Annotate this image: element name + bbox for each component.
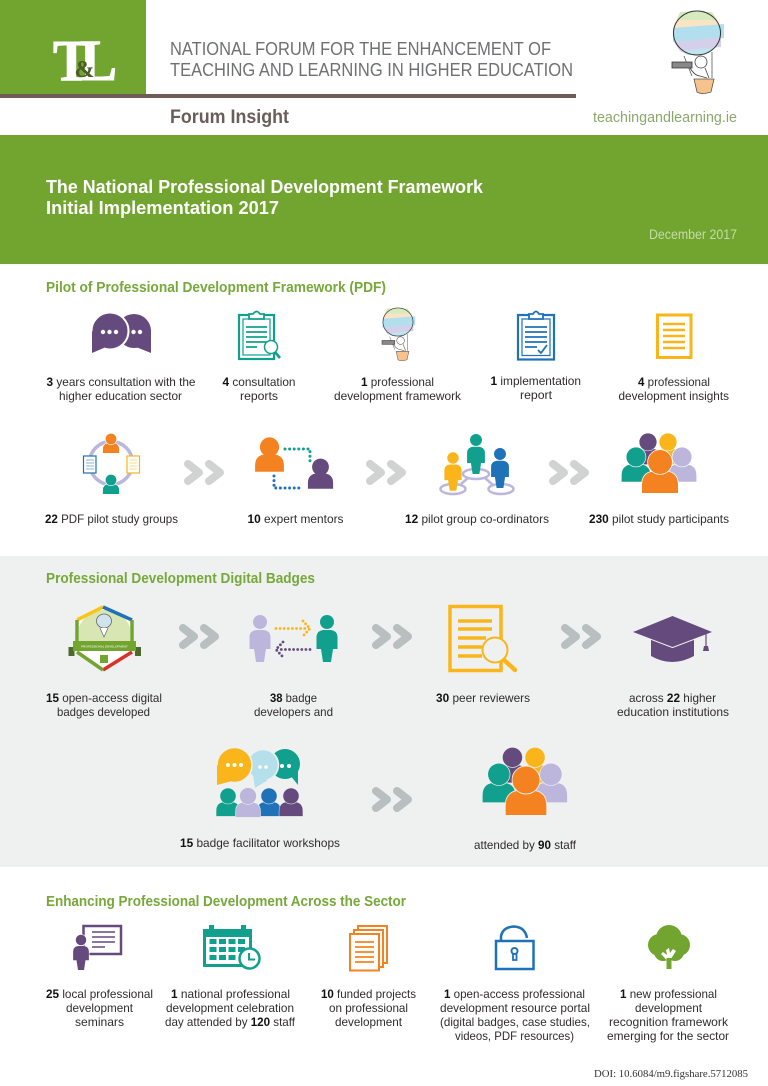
icon: pilot study groups (84, 434, 140, 494)
icon: facilitator workshop (216, 748, 303, 817)
text: across 22: education institutions (617, 705, 729, 719)
text: 1 national: development celebration (166, 1001, 294, 1015)
icon: consultation report clipboard (239, 312, 280, 359)
main title: Initial Implementation 2017 (46, 197, 279, 218)
text: 1 professional framework: 1 professional (361, 375, 434, 389)
text: 1 implementation report (490, 374, 581, 402)
icon: coordinators network (440, 434, 514, 494)
heading: pilot: Pilot of Professional Development Framework (PDF) (46, 280, 386, 296)
icon: implementation clipboard (518, 312, 554, 360)
heading: enhancing: Enhancing Professional Development Across the Sector (46, 894, 406, 910)
icon: insights document (658, 315, 691, 358)
website: teachingandlearning.ie (593, 109, 737, 126)
text: 30 reviewers: 30 peer reviewers (436, 691, 530, 705)
text: 1 implementation report: 1 implementation (490, 374, 581, 388)
text: 4 professional insights (618, 375, 729, 403)
icon: seminar presenter (73, 926, 121, 970)
arrows (183, 628, 215, 645)
label: 230 participants: 230 pilot study participants (589, 512, 729, 526)
text: 38 developers: 38 badge (270, 691, 317, 705)
text: 10 funded (321, 987, 416, 1029)
T&L logo: T (53, 28, 90, 93)
text: 90 staff: attended by 90 staff (474, 838, 577, 852)
icon: graduation cap (633, 616, 712, 662)
label: 10 mentors: 10 expert mentors (248, 512, 344, 526)
text: 10 funded: on professional (329, 1001, 408, 1015)
text: 1 new framework: 1 new professional (620, 987, 717, 1001)
icon: calendar (203, 925, 260, 968)
label: 12 coordinators: 12 pilot group co-ordinators (405, 512, 549, 526)
text: 1 open access portal: (digital badges, case studies, (440, 1015, 590, 1029)
text: 4 consultation reports: reports (240, 389, 278, 403)
text: 3 years: 3 years consultation with the (46, 375, 196, 389)
header logo panel (0, 0, 146, 95)
text: 1 national: 1 national professional (171, 987, 290, 1001)
text: 1 national: day attended by 120 staff (165, 1015, 296, 1029)
icon: hot air balloon (672, 11, 724, 94)
icon: small balloon (382, 308, 415, 361)
date: December 2017 (649, 227, 737, 242)
icon: tree (648, 925, 690, 969)
text: 1 implementation report: report (520, 388, 553, 402)
icon: open padlock (496, 926, 534, 969)
text: 4 consultation reports (222, 375, 296, 403)
main title (46, 176, 484, 218)
arrows (376, 791, 408, 808)
text: across 22: across 22 higher (629, 691, 716, 705)
text: 15 badges: 15 open-access digital (46, 691, 162, 705)
heading: badges: Professional Development Digital Badges (46, 571, 315, 587)
arrows (370, 464, 402, 481)
icon: stacked pages (350, 926, 387, 970)
text: 25 seminars: 25 local professional (46, 987, 153, 1001)
text: 15 badges: badges developed (57, 705, 150, 719)
panel: digital badges (0, 556, 768, 867)
text: 1 open access portal: 1 open-access professional (444, 987, 585, 1001)
label: 22 groups: 22 PDF pilot study groups (45, 512, 178, 526)
arrows (565, 628, 597, 645)
text: 38 developers (254, 691, 333, 719)
text: 3 years (46, 375, 196, 403)
T&L logo (53, 28, 117, 93)
arrows (188, 464, 220, 481)
text: 1 national (165, 987, 296, 1029)
text: across 22 (617, 691, 729, 719)
Forum Insight label: Forum Insight (170, 107, 290, 128)
text: 1 professional framework (334, 375, 462, 403)
arrows (376, 628, 408, 645)
arrows (553, 464, 585, 481)
header organisation title: TEACHING AND LEARNING IN HIGHER EDUCATION (170, 59, 573, 80)
text: 1 new framework: recognition framework (609, 1015, 729, 1029)
icon: badge developers exchange (250, 615, 338, 662)
icon: expert mentors (255, 437, 333, 489)
text: 4 consultation reports: 4 consultation (222, 375, 296, 389)
text: 15 workshops: 15 badge facilitator workshops (180, 836, 340, 850)
main title: The National Professional Development Framework (46, 176, 484, 197)
header organisation title: NATIONAL FORUM FOR THE ENHANCEMENT OF (170, 38, 551, 59)
T&L logo: L (80, 28, 117, 93)
text: 1 open access portal: development resource portal (440, 1001, 590, 1015)
icon: digital badge: PROFESSIONAL DEVELOPMENT (81, 644, 128, 648)
text: 1 new framework: emerging for the sector (607, 1029, 729, 1043)
icon: staff crowd (483, 748, 567, 815)
icon: peer review document (450, 606, 515, 670)
text: 4 professional insights: 4 professional (638, 375, 710, 389)
text: 10 funded: development (335, 1015, 403, 1029)
header organisation title (170, 38, 573, 80)
text: 15 badges (46, 691, 162, 719)
text: 10 funded: 10 funded projects (321, 987, 416, 1001)
icon: speech bubbles (92, 312, 151, 353)
text: 1 new framework (607, 987, 729, 1043)
icon: digital badge (68, 607, 141, 670)
text: 3 years: higher education sector (59, 389, 182, 403)
title banner (0, 135, 768, 264)
text: 1 open access portal: videos, PDF resources) (455, 1029, 574, 1043)
T&L logo: & (74, 57, 94, 83)
text: 1 professional framework: development framework (334, 389, 462, 403)
text: 25 seminars (46, 987, 153, 1029)
text: 4 professional insights: development insights (618, 389, 729, 403)
text: 38 developers: developers and (254, 705, 333, 719)
text: 25 seminars: seminars (75, 1015, 124, 1029)
text: 25 seminars: development (66, 1001, 134, 1015)
icon: participants crowd (622, 433, 696, 493)
text: 1 open access portal (440, 987, 590, 1043)
DOI note: DOI: 10.6084/m9.figshare.5712085 (594, 1069, 748, 1080)
text: 1 new framework: development (635, 1001, 703, 1015)
